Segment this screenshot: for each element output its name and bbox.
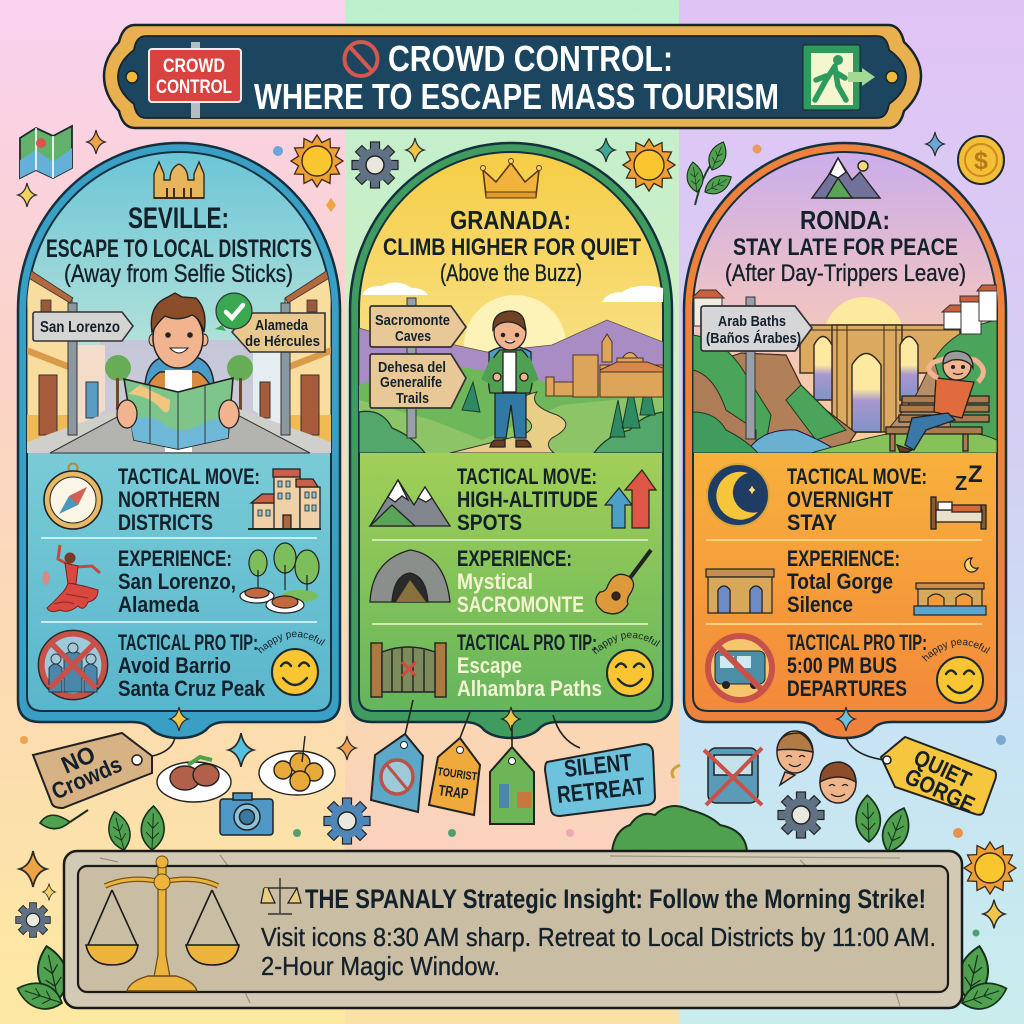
leaves <box>855 795 915 856</box>
heading: Ronda: (After Day-Trippers Leave) <box>725 260 966 287</box>
row: tactical pro tip: 5:00 PM BUS <box>787 653 897 678</box>
icon: smiley <box>922 640 990 704</box>
row: experience: SACROMONTE <box>457 592 584 617</box>
row: experience <box>370 546 651 617</box>
side icons: bottom corners <box>14 842 1016 1015</box>
row: tactical pro tip: TACTICAL PRO TIP: <box>118 630 258 655</box>
icon: bed: Z <box>968 461 983 488</box>
row: experience: EXPERIENCE: <box>118 546 232 571</box>
signposts: Sacromonte and Generalife: Generalife <box>380 374 442 391</box>
tag: no crowds: Crowds <box>47 751 126 805</box>
icon: no entry <box>344 42 378 76</box>
row: experience: EXPERIENCE: <box>457 546 572 571</box>
row: experience <box>42 543 319 617</box>
decorative icons: top row <box>18 126 1004 212</box>
row: tactical pro tip: TACTICAL PRO TIP: <box>787 630 927 655</box>
icon: smiley: happy peaceful <box>592 632 660 654</box>
icon: check bubble <box>215 293 252 331</box>
text: insight heading <box>261 878 926 914</box>
row: tactical pro tip <box>370 630 660 701</box>
row: tactical move <box>44 464 321 535</box>
row: tactical move: STAY <box>787 510 837 535</box>
tag: quiet gorge: QUIET <box>910 744 975 793</box>
row: experience: Mystical <box>457 569 533 594</box>
crowd control sign <box>149 42 241 118</box>
title text: WHERE TO ESCAPE MASS TOURISM <box>254 76 779 117</box>
signpost: Arab Baths: Arab Baths <box>718 313 786 330</box>
tag: silent retreat: RETREAT <box>556 773 646 809</box>
row: tactical move: OVERNIGHT <box>787 487 893 512</box>
signposts: Sacromonte and Generalife: Trails <box>396 390 429 407</box>
icon: smiley: happy peaceful <box>256 632 326 654</box>
icon: moon <box>707 464 769 526</box>
signpost: Arab Baths <box>701 297 812 439</box>
title banner <box>104 25 921 128</box>
street signs: San Lorenzo <box>40 319 120 336</box>
tag: green market <box>490 747 534 824</box>
tag: silent retreat: SILENT <box>563 749 634 783</box>
signposts: Sacromonte and Generalife: Sacromonte <box>375 312 450 329</box>
tags and icons: Ronda <box>704 731 1006 856</box>
icon: trees and plates <box>240 543 319 613</box>
icon: flamenco dancer <box>42 545 100 612</box>
icon: smiley <box>256 632 326 696</box>
row: tactical move <box>707 461 986 535</box>
heading: Ronda: RONDA: <box>800 205 890 235</box>
icon: buildings <box>248 469 321 529</box>
heading: Ronda: STAY LATE FOR PEACE <box>733 234 958 261</box>
figure: backpacker with map <box>117 293 239 452</box>
row: experience: EXPERIENCE: <box>787 546 900 571</box>
icon: cathedral <box>154 162 204 198</box>
panel: Ronda <box>682 142 1008 740</box>
row: tactical pro tip: Santa Cruz Peak <box>118 676 266 701</box>
icon: mountains <box>370 480 450 526</box>
row: tactical move: HIGH-ALTITUDE <box>457 487 598 512</box>
icon: faces <box>777 731 856 803</box>
row: tactical pro tip: Escape <box>457 653 522 678</box>
icon: sun <box>291 135 343 187</box>
icon: up arrows <box>605 470 656 528</box>
tag: tourist trap: TOURIST <box>437 766 478 784</box>
signposts: Sacromonte and Generalife: Dehesa del <box>378 359 446 376</box>
icon: gear <box>778 792 824 838</box>
icon: exit sign <box>803 45 875 110</box>
tag: quiet gorge: GORGE <box>901 763 979 818</box>
signposts: Sacromonte and Generalife: Caves <box>395 328 431 345</box>
icon: no bus <box>708 636 772 700</box>
row: tactical move: TACTICAL MOVE: <box>118 464 260 489</box>
heading: Granada: GRANADA: <box>450 205 571 235</box>
signposts: Sacromonte and Generalife <box>370 298 466 438</box>
icon: no crowds <box>38 630 108 700</box>
row: tactical pro tip: TACTICAL PRO TIP: <box>457 630 597 655</box>
heading: Seville: SEVILLE: <box>128 202 229 235</box>
heading: Seville <box>46 202 312 288</box>
tags and icons: Seville <box>20 733 370 852</box>
row: tactical move: TACTICAL MOVE: <box>787 464 927 489</box>
scene: Puente Nuevo gorge <box>692 285 997 455</box>
tag: no crowds <box>33 733 152 808</box>
signpost: Arab Baths: (Baños Árabes) <box>706 330 801 347</box>
icon: coin <box>958 136 1004 184</box>
row: tactical pro tip <box>705 630 990 704</box>
leaves <box>40 806 165 852</box>
street signs: de Hércules <box>245 333 320 350</box>
title text <box>254 38 779 117</box>
icon: map <box>20 126 72 178</box>
scene: street with backpacker <box>27 268 332 453</box>
heading: Granada: CLIMB HIGHER FOR QUIET <box>383 234 641 261</box>
street signs <box>33 303 325 435</box>
icon: cave <box>370 550 450 602</box>
row: tactical pro tip: DEPARTURES <box>787 676 907 701</box>
row: tactical pro tip: Avoid Barrio <box>118 653 231 678</box>
icon: bed: Z <box>955 473 967 495</box>
row: tactical move: NORTHERN <box>118 487 220 512</box>
icon: gear <box>324 798 370 844</box>
icon: gate <box>371 643 446 697</box>
panel: strategic insight <box>64 851 962 1008</box>
tag: tourist trap: TRAP <box>437 782 470 803</box>
figure: man relaxing on bench <box>886 351 989 452</box>
icon: camera <box>220 793 273 835</box>
row: experience: Alameda <box>118 592 200 617</box>
title text: CROWD CONTROL: <box>388 38 673 79</box>
icon: plate of tapas <box>259 736 335 795</box>
row: experience: Silence <box>787 592 853 617</box>
tag: no sign <box>371 734 423 812</box>
icon: gear <box>352 142 398 188</box>
crowd control sign: CROWD <box>163 56 225 77</box>
text: insight body: 2-Hour Magic Window. <box>261 951 500 981</box>
row: tactical move: DISTRICTS <box>118 510 213 535</box>
icon: compass <box>44 464 102 529</box>
tag: no crowds: NO <box>57 741 100 779</box>
street signs: Alameda <box>255 317 309 334</box>
crowd control sign: CONTROL <box>156 77 232 98</box>
scene: hills and Alhambra <box>359 282 663 453</box>
icon: crown <box>480 158 542 198</box>
icon: plate of ham <box>157 757 231 802</box>
row: tactical move <box>370 464 656 535</box>
heading: Ronda <box>725 205 966 287</box>
icon: bridge over water <box>914 558 986 615</box>
icon: coin: $ <box>974 147 988 175</box>
icon: sun <box>623 139 675 191</box>
icon: smiley: happy peaceful <box>922 640 990 662</box>
tag: silent retreat <box>545 744 655 816</box>
icon: smiley <box>592 632 660 697</box>
heading: Granada <box>383 205 641 287</box>
heading: Seville: (Away from Selfie Sticks) <box>64 260 293 288</box>
row: tactical pro tip: Alhambra Paths <box>457 676 602 701</box>
row: tactical move: SPOTS <box>457 510 522 535</box>
icon: guitar <box>596 550 651 614</box>
icon: mountain peak <box>812 158 880 198</box>
icon: leaves <box>685 139 735 205</box>
tag: tourist trap <box>429 738 480 815</box>
text: insight body <box>261 922 936 981</box>
icon: bush <box>612 806 747 851</box>
row: experience <box>706 546 986 617</box>
heading: Seville: ESCAPE TO LOCAL DISTRICTS <box>46 235 312 263</box>
figure: hiker <box>485 311 535 447</box>
row: tactical pro tip <box>38 630 326 701</box>
icon: bed <box>931 461 986 529</box>
panel: Seville <box>16 142 342 740</box>
panel: Granada <box>348 142 674 740</box>
row: experience: Total Gorge <box>787 569 893 594</box>
text: insight body: Visit icons 8:30 AM sharp. Retreat to Local Districts by 11:00 AM. <box>261 922 936 952</box>
tag: quiet gorge <box>881 737 996 818</box>
heading: Granada: (Above the Buzz) <box>440 260 582 287</box>
row: experience: San Lorenzo, <box>118 569 236 594</box>
icon: bridge at night <box>706 569 774 613</box>
tags and icons: Granada <box>371 700 747 851</box>
icon: balance scale <box>86 856 239 991</box>
row: tactical move: TACTICAL MOVE: <box>457 464 597 489</box>
icon: bus crossed <box>704 748 762 805</box>
